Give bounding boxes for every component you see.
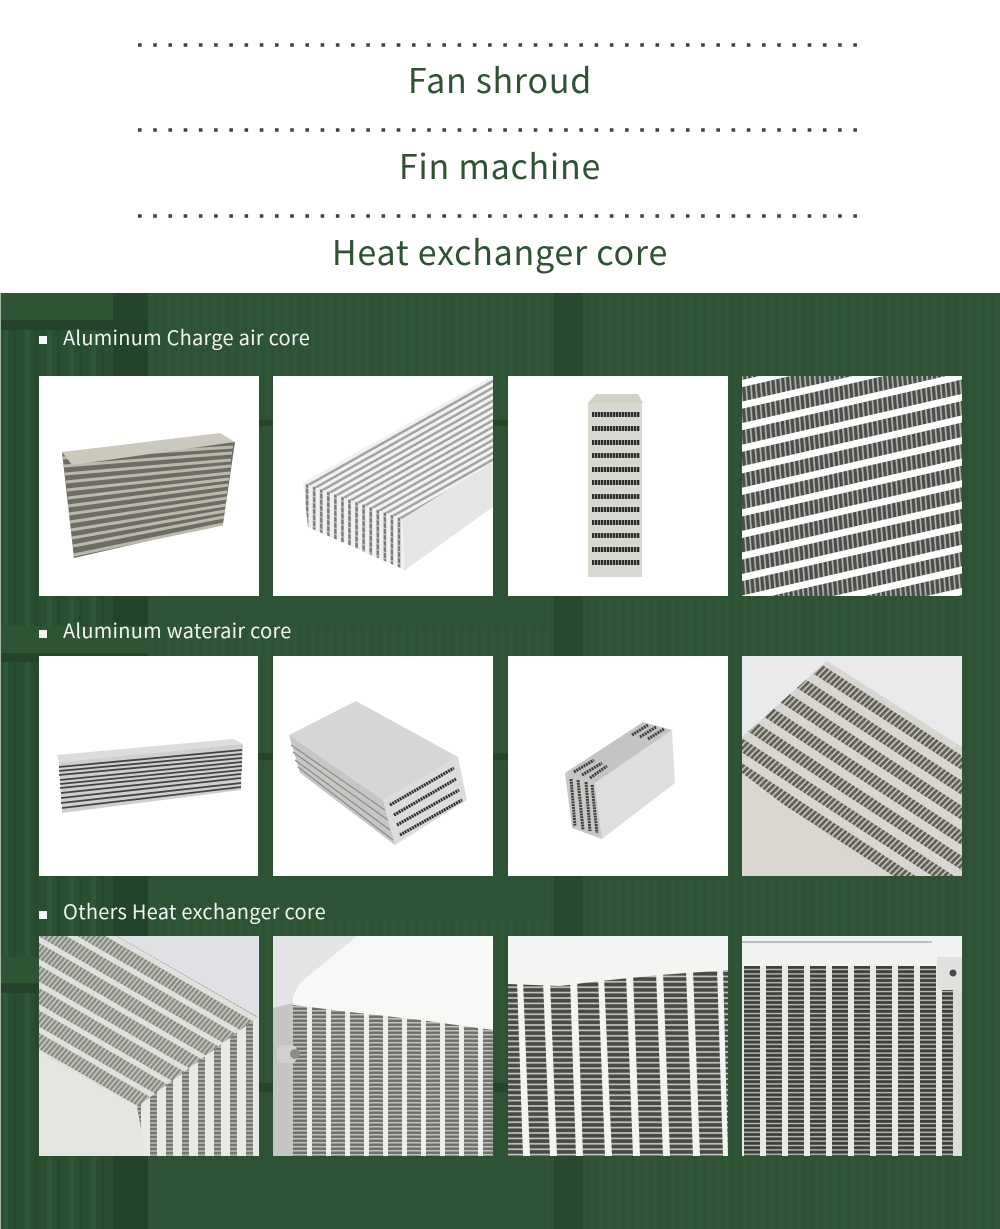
section heading: Aluminum waterair core: Aluminum waterair core xyxy=(63,615,292,644)
dotted divider 1 xyxy=(138,43,859,47)
title: Fan shroud: Fan shroud xyxy=(408,54,592,103)
dotted divider 2 xyxy=(138,128,859,132)
photo: water air core stacked block xyxy=(273,656,493,876)
bracket xyxy=(937,957,962,990)
photo: charge air core angled view xyxy=(273,376,493,596)
photo: charge air core end view xyxy=(508,376,728,596)
photo: water air core fin close-up xyxy=(742,656,962,876)
background: green wood panel xyxy=(0,293,1000,1229)
photo: water air core small block xyxy=(508,656,728,876)
section heading: Aluminum Charge air core: Aluminum Charge air core xyxy=(63,322,310,351)
section heading: Others Heat exchanger core: Others Heat exchanger core xyxy=(63,896,326,925)
title: Heat exchanger core: Heat exchanger core xyxy=(332,226,668,275)
icon: bolt xyxy=(277,1045,300,1063)
photo: charge air core fin close-up xyxy=(742,376,962,596)
title: Fin machine: Fin machine xyxy=(399,140,601,189)
photo: water air core long block xyxy=(39,656,258,876)
photo: core fins and weld xyxy=(508,936,728,1156)
photo: fin corner close-up xyxy=(39,936,259,1156)
photo: core fins with bracket xyxy=(742,936,962,1156)
photo: core with welded tank and bolt xyxy=(273,936,493,1156)
photo: charge air core front view xyxy=(39,376,259,596)
dotted divider 3 xyxy=(138,214,859,218)
